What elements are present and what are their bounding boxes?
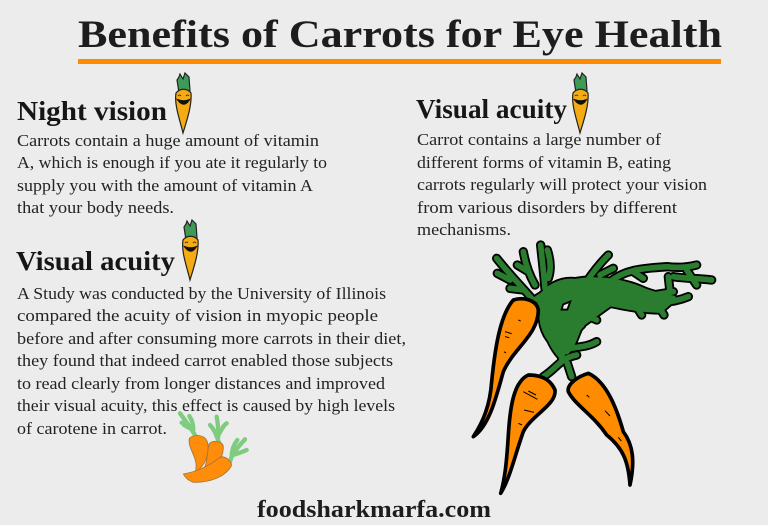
text: vitamin B body: from various disorders by different	[417, 198, 677, 217]
icon: smiling carrot	[176, 73, 191, 133]
text: vitamin B body	[417, 130, 707, 239]
text: university study body: to read clearly from longer distances and improved	[17, 374, 386, 393]
text: night vision body: A, which is enough if you ate it regularly to	[17, 153, 327, 172]
section: night vision	[17, 73, 327, 217]
text: night vision body: that your body needs.	[17, 198, 174, 217]
text: vitamin B body: Carrot contains a large number of	[417, 130, 662, 149]
text: night vision body	[17, 131, 327, 217]
text: university study body: of carotene in carrot.	[17, 419, 167, 438]
title underline	[78, 59, 721, 64]
heading: night vision: Night vision	[17, 96, 167, 126]
section: visual acuity, left	[16, 220, 406, 438]
text: university study body: compared the acuity of vision in myopic people	[17, 306, 378, 325]
heading: visual acuity: Visual acuity	[16, 246, 176, 276]
text: university study body: they found that indeed carrot enabled those subjects	[17, 351, 393, 370]
illustration: carrot bunch	[473, 245, 712, 493]
text: university study body	[17, 284, 406, 438]
text: vitamin B body: carrots regularly will protect your vision	[417, 175, 707, 194]
text: university study body: A Study was conducted by the University of Illinois	[17, 284, 386, 303]
text: university study body: their visual acuity, this effect is caused by high levels	[17, 396, 395, 415]
section: visual acuity, right	[416, 73, 707, 239]
heading: visual acuity: Visual acuity	[416, 94, 568, 124]
text: night vision body: supply you with the amount of vitamin A	[17, 176, 313, 195]
text: vitamin B body: different forms of vitamin B, eating	[417, 153, 671, 172]
footer: website: foodsharkmarfa.com	[257, 497, 491, 523]
text: university study body: before and after consuming more carrots in their diet,	[17, 329, 406, 348]
icon: smiling carrot	[183, 220, 198, 280]
title: Benefits of Carrots for Eye Health	[78, 13, 722, 56]
text: vitamin B body: mechanisms.	[417, 220, 511, 239]
illustration: small carrot bunch	[180, 413, 247, 482]
text: night vision body: Carrots contain a huge amount of vitamin	[17, 131, 319, 150]
icon: smiling carrot	[573, 73, 588, 133]
